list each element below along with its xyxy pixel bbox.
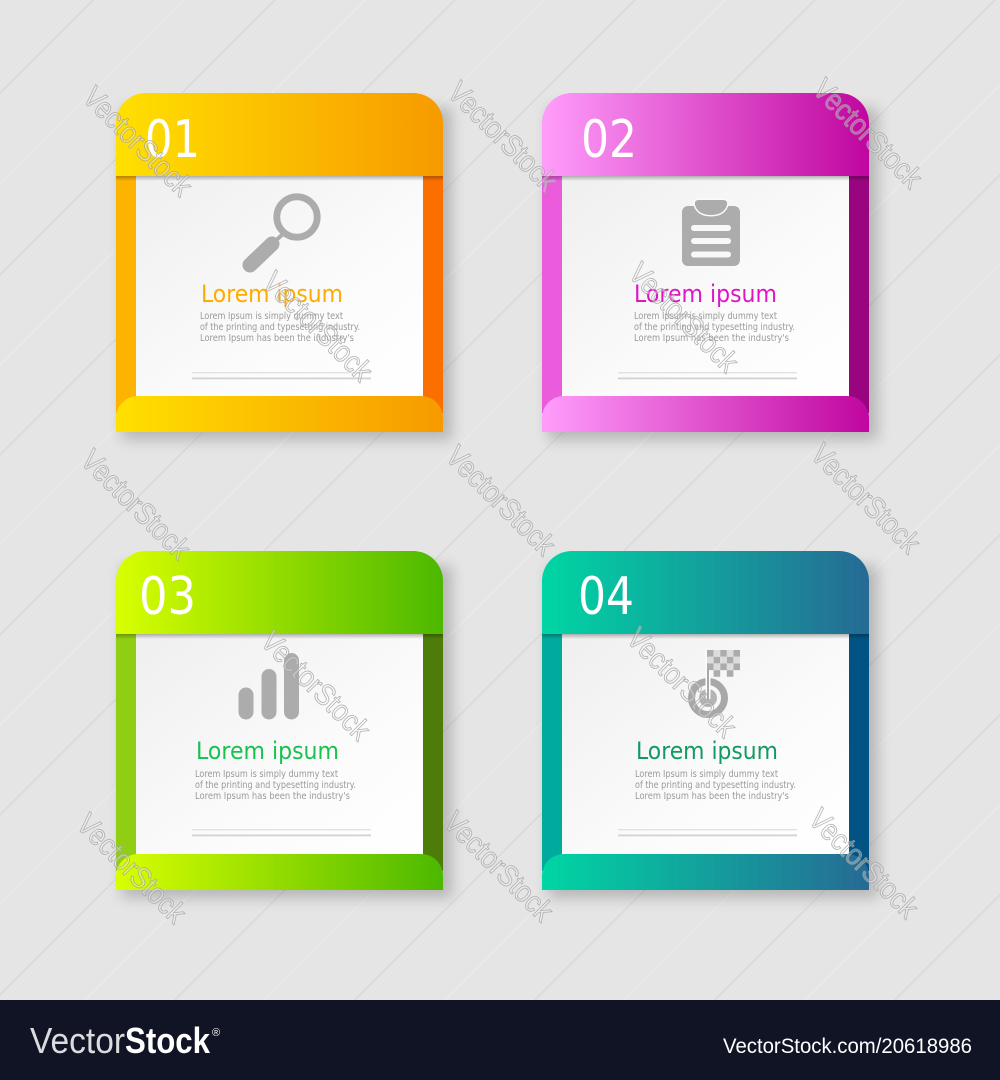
header band [116,93,443,176]
icon: target with checkered flag [692,650,740,714]
white content area [562,634,849,855]
divider lines [618,372,797,379]
white content area [136,634,423,855]
heading: Lorem ipsum [196,737,339,765]
footer logo: Stock [125,1020,211,1061]
divider lines [618,829,797,836]
body text [635,769,796,802]
body text: of the printing and typesetting industry. [200,322,360,333]
panel: card 02 [542,93,869,432]
body text: of the printing and typesetting industry. [195,780,356,791]
header band [542,551,869,634]
footer bar [0,1000,1000,1080]
body text: of the printing and typesetting industry. [634,322,795,333]
white content area [136,176,423,397]
body text [195,769,356,802]
panel: card 04 [542,551,869,890]
heading: Lorem ipsum [636,737,778,765]
white content area [562,176,849,397]
card 02 shadow [548,108,878,440]
footer logo [30,1020,220,1061]
body text [634,311,795,344]
right strip [849,173,869,413]
watermark overlay: VectorStock [620,622,743,745]
watermark overlay: VectorStock [74,444,197,567]
icon: clipboard [682,200,740,266]
body text: Lorem Ipsum has been the industry's [635,791,789,802]
body text: Lorem Ipsum is simply dummy text [634,311,777,322]
number: 04 [578,567,634,627]
number: 01 [145,110,200,170]
left strip [542,173,562,413]
footer image id: VectorStock.com/20618986 [723,1035,972,1058]
body text: Lorem Ipsum is simply dummy text [635,769,778,780]
heading: Lorem ipsum [634,280,777,308]
watermark overlay: VectorStock [70,808,193,931]
watermark overlay: VectorStock [804,438,927,561]
right strip [423,631,443,871]
watermark overlay: VectorStock [76,81,199,204]
card 01 shadow [122,108,452,440]
footer band [116,396,443,432]
footer band [542,396,869,432]
body text: Lorem Ipsum has been the industry's [195,791,350,802]
footer band [542,854,869,890]
watermark overlay: VectorStock [254,625,377,748]
card 04 shadow [548,566,878,898]
heading: Lorem ipsum [201,280,343,308]
icon: bar chart [238,653,299,720]
left strip [116,631,136,871]
number: 02 [581,110,637,170]
watermark overlay: VectorStock [622,257,745,380]
body text: Lorem Ipsum has been the industry's [200,333,354,344]
footer logo: ® [212,1027,220,1039]
watermark overlay: VectorStock [256,266,379,389]
watermark overlay: VectorStock [439,440,562,563]
right strip [423,173,443,413]
footer band [116,854,443,890]
footer logo: Vector [30,1020,125,1061]
header band [542,93,869,176]
watermark overlay: VectorStock [806,73,929,196]
left strip [116,173,136,413]
panel: card 01 [116,93,443,432]
watermark overlay [70,73,929,931]
right strip [849,631,869,871]
header band [116,551,443,634]
panel: card 03 [116,551,443,890]
body text: Lorem Ipsum has been the industry's [634,333,789,344]
icon: magnifier [250,197,317,265]
divider lines [192,829,371,836]
watermark overlay: VectorStock [437,806,560,929]
body text: Lorem Ipsum is simply dummy text [195,769,338,780]
body text [200,311,360,344]
body text: Lorem Ipsum is simply dummy text [200,311,343,322]
watermark overlay: VectorStock [802,803,925,926]
divider lines [192,372,371,379]
number: 03 [139,567,196,627]
body text: of the printing and typesetting industry. [635,780,796,791]
watermark overlay: VectorStock [441,76,564,199]
card 03 shadow [122,566,452,898]
left strip [542,631,562,871]
